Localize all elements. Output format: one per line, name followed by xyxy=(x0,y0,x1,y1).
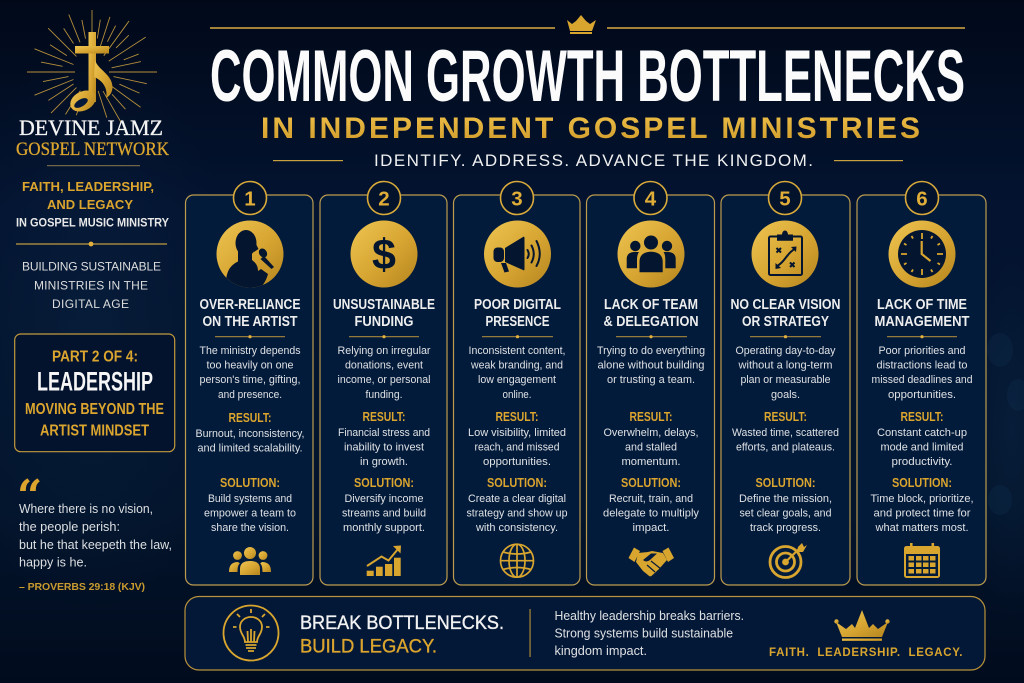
scripture quote: but he that keepeth the law, xyxy=(19,538,172,552)
description: online. xyxy=(502,389,532,401)
banner headline xyxy=(300,612,504,658)
series description: BUILDING SUSTAINABLE xyxy=(22,260,161,274)
result: productivity. xyxy=(892,456,952,468)
panel: card 4 team xyxy=(586,182,714,585)
description: and presence. xyxy=(218,389,282,401)
result: mode and limited xyxy=(880,442,964,454)
icon: calendar xyxy=(904,543,940,578)
result: in growth. xyxy=(360,456,408,468)
result: reach, and missed xyxy=(474,442,560,454)
banner message: kingdom impact. xyxy=(554,644,647,658)
description xyxy=(736,345,836,401)
result xyxy=(338,410,430,468)
solution xyxy=(870,476,974,534)
brand name xyxy=(16,115,169,166)
solution: share the vision. xyxy=(211,522,289,534)
description xyxy=(597,345,705,386)
solution xyxy=(204,476,296,534)
solution: SOLUTION: xyxy=(892,476,952,490)
description: or trusting a team. xyxy=(607,374,695,386)
solution xyxy=(466,476,568,534)
result: Constant catch-up xyxy=(877,427,967,439)
description: plan or measurable xyxy=(740,374,830,386)
heading: OR STRATEGY xyxy=(742,314,829,330)
result xyxy=(877,410,967,468)
panel: card 2 funding xyxy=(320,182,447,585)
number 1: 1 xyxy=(244,188,256,210)
result: efforts, and plateaus. xyxy=(736,442,835,454)
heading: NO CLEAR VISION xyxy=(730,297,840,313)
icon: clipboard strategy xyxy=(752,220,818,288)
icon: clock xyxy=(888,220,956,288)
solution: delegate to multiply xyxy=(603,508,699,520)
banner message: Healthy leadership breaks barriers. xyxy=(554,609,744,623)
description: Relying on irregular xyxy=(338,345,431,357)
heading xyxy=(333,297,435,330)
description: The ministry depends xyxy=(200,345,301,357)
description: too heavily on one xyxy=(206,360,294,372)
solution: empower a team to xyxy=(204,508,296,520)
icon: singer xyxy=(216,220,284,294)
description xyxy=(200,345,301,401)
solution: and protect time for xyxy=(874,508,971,520)
icon: team xyxy=(618,220,684,288)
number 3 xyxy=(500,182,534,214)
description: low engagement xyxy=(478,374,557,386)
description: Inconsistent content, xyxy=(468,345,566,357)
panel: part 2 of 4 xyxy=(15,334,175,452)
solution: SOLUTION: xyxy=(487,476,547,490)
result: and stalled xyxy=(625,442,677,454)
solution: Recruit, train, and xyxy=(609,493,693,505)
panel: card 1 over-reliance xyxy=(186,182,313,585)
result: RESULT: xyxy=(630,410,672,424)
number 2: 2 xyxy=(378,188,390,210)
number 5: 5 xyxy=(779,188,791,210)
icon: globe xyxy=(500,544,534,577)
result: Wasted time, scattered xyxy=(732,427,839,439)
solution: with consistency. xyxy=(475,522,558,534)
result: RESULT: xyxy=(496,410,538,424)
description xyxy=(872,345,972,401)
number 4: 4 xyxy=(645,188,657,210)
brand name: GOSPEL NETWORK xyxy=(16,139,169,160)
heading: FUNDING xyxy=(354,314,414,330)
icon: team xyxy=(229,547,271,575)
result xyxy=(468,410,566,468)
heading: & DELEGATION xyxy=(604,314,698,330)
result: momentum. xyxy=(622,456,680,468)
icon: handshake xyxy=(628,548,674,576)
solution: set clear goals, and xyxy=(740,508,832,520)
solution: Define the mission, xyxy=(739,493,832,505)
banner headline: BREAK BOTTLENECKS. xyxy=(300,612,504,634)
description: Poor priorities and xyxy=(878,345,966,357)
banner headline: BUILD LEGACY. xyxy=(300,636,437,658)
number 1 xyxy=(234,182,266,214)
scripture quote: happy is he. xyxy=(19,556,87,570)
heading xyxy=(874,297,970,330)
panel: card 3 digital xyxy=(454,182,580,585)
scripture quote: – PROVERBS 29:18 (KJV) xyxy=(19,581,145,593)
solution: SOLUTION: xyxy=(220,476,280,490)
description: funding. xyxy=(366,389,402,401)
number 4 xyxy=(634,182,667,214)
solution xyxy=(603,476,699,534)
description: income, or personal xyxy=(338,374,430,386)
result: and limited scalability. xyxy=(198,443,302,455)
number 3: 3 xyxy=(511,188,523,210)
icon: target xyxy=(770,543,807,578)
top rule with crown xyxy=(210,15,965,34)
description: Operating day-to-day xyxy=(736,345,836,357)
description: without a long-term xyxy=(738,360,832,372)
series description: AND LEGACY xyxy=(47,197,133,212)
description: donations, event xyxy=(345,360,424,372)
result xyxy=(196,411,304,455)
icon: growth chart xyxy=(367,546,401,576)
result: RESULT: xyxy=(900,410,944,424)
heading xyxy=(474,297,561,330)
result xyxy=(732,410,839,454)
number 6: 6 xyxy=(916,188,928,210)
description: opportunities. xyxy=(888,389,956,401)
result: Low visibility, limited xyxy=(468,427,566,439)
subtitle: IN INDEPENDENT GOSPEL MINISTRIES xyxy=(261,112,920,145)
banner motto: FAITH. LEADERSHIP. LEGACY. xyxy=(769,647,962,659)
series description: DIGITAL AGE xyxy=(52,297,129,311)
description: distractions lead to xyxy=(876,360,968,372)
number 6 xyxy=(906,182,938,214)
heading: OVER-RELIANCE xyxy=(200,297,301,313)
solution: monthly support. xyxy=(343,522,425,534)
solution: what matters most. xyxy=(875,522,968,534)
result: inability to invest xyxy=(344,442,425,454)
panel: card 5 vision xyxy=(721,182,850,585)
banner message: Strong systems build sustainable xyxy=(554,626,733,640)
result: Financial stress and xyxy=(338,427,430,439)
result: RESULT: xyxy=(764,410,807,424)
number 5 xyxy=(768,182,802,214)
series description xyxy=(16,179,169,311)
heading: PRESENCE xyxy=(486,314,550,330)
heading xyxy=(200,297,301,330)
panel: part 2 of 4: ARTIST MINDSET xyxy=(40,423,149,440)
solution: Create a clear digital xyxy=(468,493,566,505)
heading: ON THE ARTIST xyxy=(202,314,298,330)
tagline: IDENTIFY. ADDRESS. ADVANCE THE KINGDOM. xyxy=(374,151,813,170)
description xyxy=(468,345,566,401)
solution: Diversify income xyxy=(344,493,424,505)
banner message xyxy=(554,609,744,658)
result: RESULT: xyxy=(362,410,406,424)
panel: bottom banner xyxy=(185,596,985,670)
solution: streams and build xyxy=(342,508,426,520)
heading: LACK OF TEAM xyxy=(604,297,698,313)
panel: part 2 of 4: PART 2 OF 4: xyxy=(52,349,138,366)
description: alone without building xyxy=(598,360,704,372)
heading: MANAGEMENT xyxy=(874,314,970,330)
result: Overwhelm, delays, xyxy=(604,427,698,439)
description: missed deadlines and xyxy=(872,374,972,386)
scripture quote xyxy=(19,502,172,593)
description xyxy=(338,345,431,401)
solution: Build systems and xyxy=(208,493,292,505)
solution xyxy=(342,476,426,534)
solution: SOLUTION: xyxy=(621,476,681,490)
heading xyxy=(604,297,698,330)
solution: impact. xyxy=(632,522,670,534)
scripture quote: Where there is no vision, xyxy=(19,502,153,516)
panel: part 2 of 4: LEADERSHIP xyxy=(37,367,153,397)
icon: dollar xyxy=(350,220,418,288)
heading xyxy=(730,297,840,330)
icon: megaphone xyxy=(484,220,551,288)
brand name: DEVINE JAMZ xyxy=(19,115,163,140)
quote mark: “ xyxy=(17,471,42,522)
icon: lightbulb xyxy=(224,606,278,660)
description: goals. xyxy=(771,389,800,401)
result: Burnout, inconsistency, xyxy=(196,428,304,440)
series description: IN GOSPEL MUSIC MINISTRY xyxy=(16,218,169,230)
result xyxy=(604,410,698,468)
description: weak branding, and xyxy=(470,360,563,372)
solution: SOLUTION: xyxy=(756,476,816,490)
heading: UNSUSTAINABLE xyxy=(333,297,435,313)
number 2 xyxy=(368,182,400,214)
panel: part 2 of 4: MOVING BEYOND THE xyxy=(25,401,164,418)
solution: SOLUTION: xyxy=(354,476,414,490)
result: RESULT: xyxy=(228,411,272,425)
logo: cross, note and rays xyxy=(27,10,157,122)
solution: track progress. xyxy=(750,522,821,534)
result: opportunities. xyxy=(483,456,551,468)
solution: Time block, prioritize, xyxy=(870,493,974,505)
heading: POOR DIGITAL xyxy=(474,297,561,313)
icon: dollar: $ xyxy=(372,231,396,279)
solution xyxy=(739,476,832,534)
panel: card 6 time xyxy=(857,182,986,585)
description: person's time, gifting, xyxy=(200,374,300,386)
series description: MINISTRIES IN THE xyxy=(34,279,148,293)
description: Trying to do everything xyxy=(597,345,705,357)
icon: crown xyxy=(834,610,890,641)
solution: strategy and show up xyxy=(466,508,568,520)
series description: FAITH, LEADERSHIP, xyxy=(22,179,154,194)
heading: LACK OF TIME xyxy=(877,297,967,313)
scripture quote: the people perish: xyxy=(19,520,120,534)
